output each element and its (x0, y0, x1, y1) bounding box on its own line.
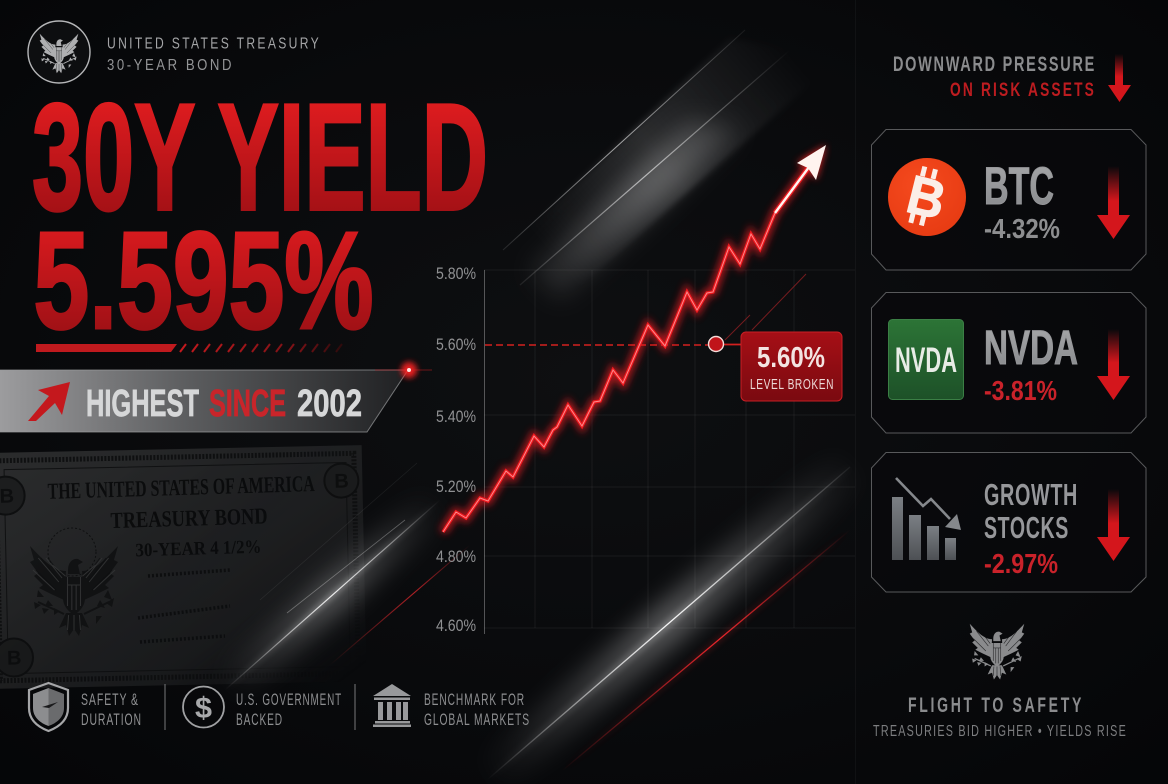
panel: NVDA (872, 292, 1146, 433)
growth stocks change: -2.97% (984, 548, 1058, 579)
bottom feature row (29, 683, 530, 731)
icon: down arrow (1108, 54, 1131, 102)
icon: temple (373, 684, 411, 727)
axis labels: 4.80% (436, 547, 476, 566)
banner text (86, 383, 362, 425)
right column divider (855, 0, 856, 784)
left diagonal light streak (225, 463, 470, 690)
icon: down arrow (1097, 489, 1130, 561)
upper diagonal light streak (490, 30, 840, 366)
callout: 5.60% level broken: LEVEL BROKEN (750, 377, 834, 393)
bond text: THE UNITED STATES OF AMERICA (47, 471, 315, 504)
arrow head (775, 145, 826, 213)
banner text: SINCE (209, 383, 286, 425)
faint red accent lines (725, 274, 806, 340)
BTC label: BTC (984, 157, 1054, 216)
panel: growth stocks (872, 452, 1146, 592)
header seal and title (28, 21, 321, 83)
heading underline bar (36, 344, 342, 352)
icon: dollar circle: $ (195, 692, 212, 725)
axis labels: 5.20% (436, 477, 476, 496)
text: safety and duration: DURATION (81, 710, 142, 729)
text: benchmark: GLOBAL MARKETS (424, 710, 530, 729)
icon: bitcoin: B (901, 164, 951, 231)
panel: treasury bond certificate: B (7, 647, 22, 670)
icon: down arrow (1097, 166, 1130, 239)
banner text: HIGHEST (86, 383, 199, 425)
right header: downward pressure (893, 53, 1131, 102)
banner text: 2002 (297, 383, 362, 425)
text: flight to safety (873, 694, 1127, 740)
icon: eagle seal (28, 21, 90, 83)
BTC change: -4.32% (984, 213, 1060, 244)
text: safety and duration (81, 690, 142, 729)
text: government backed: U.S. GOVERNMENT (236, 690, 342, 709)
axis labels: 5.60% (436, 335, 476, 354)
header text (107, 36, 321, 74)
header text: UNITED STATES TREASURY (107, 36, 321, 52)
icon: shield (29, 683, 68, 731)
text: government backed: BACKED (236, 710, 283, 729)
bond text (48, 476, 314, 556)
callout: 5.60% level broken: 5.60% (757, 342, 825, 374)
icon: falling bars (892, 478, 961, 560)
icon: dollar circle (183, 686, 224, 728)
NVDA change: -3.81% (984, 375, 1057, 406)
axis labels: 5.40% (436, 407, 476, 426)
chart axis (484, 270, 486, 634)
right header: downward pressure: ON RISK ASSETS (950, 80, 1096, 101)
bond text: 30-YEAR 4 1/2% (135, 537, 262, 561)
text: benchmark (424, 690, 530, 729)
panel: treasury bond certificate: B (334, 470, 349, 493)
icon: bitcoin (888, 158, 966, 236)
NVDA label: NVDA (984, 322, 1078, 375)
panel: treasury bond certificate (0, 445, 367, 689)
icon: eagle emblem (970, 624, 1024, 680)
lower diagonal light streak (487, 467, 850, 780)
bond text: TREASURY BOND (110, 503, 268, 533)
breakout marker (708, 336, 742, 352)
5.60% dashed level (485, 344, 708, 346)
text: benchmark: BENCHMARK FOR (424, 690, 525, 709)
icon: NVDA tile: NVDA (895, 341, 957, 380)
growth stocks label (984, 477, 1078, 545)
icon: NVDA tile (888, 320, 964, 400)
chart grid (484, 270, 855, 628)
banner: highest since 2002 (0, 362, 432, 432)
yield line glow (443, 158, 815, 532)
growth stocks label: GROWTH (984, 477, 1078, 512)
text: safety and duration: SAFETY & (81, 690, 139, 709)
heading: 30Y YIELD: 30Y YIELD (32, 72, 488, 242)
axis labels (436, 264, 476, 635)
axis labels: 5.80% (436, 264, 476, 283)
callout: 5.60% level broken (741, 332, 842, 401)
icon: red up arrow (28, 382, 70, 421)
axis labels: 4.60% (436, 616, 476, 635)
bond eagle (30, 528, 118, 636)
banner flare (375, 362, 432, 378)
text: flight to safety: FLIGHT TO SAFETY (908, 694, 1084, 717)
icon: down arrow (1097, 329, 1130, 400)
chart: 30-year yield line (436, 145, 855, 635)
growth stocks label: STOCKS (984, 510, 1069, 545)
bond signature scribbles (138, 570, 230, 642)
text: government backed (236, 690, 342, 729)
header text: 30-YEAR BOND (107, 57, 234, 74)
heading: 5.595%: 5.595% (34, 204, 374, 358)
panel: BTC (872, 130, 1146, 270)
